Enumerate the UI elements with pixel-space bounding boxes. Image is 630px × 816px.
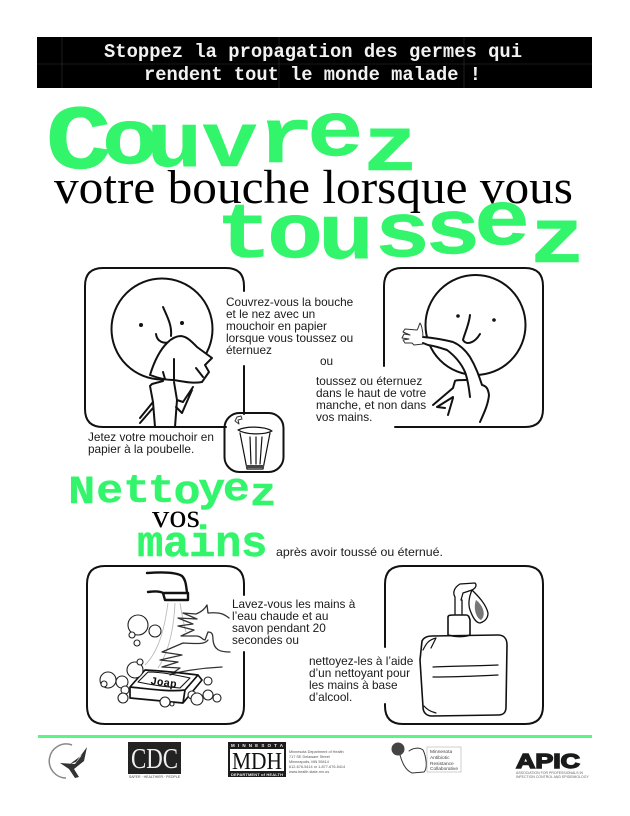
panel frame 3 xyxy=(87,566,244,724)
instruction: sleeve text: dans le haut de votre xyxy=(316,386,427,400)
header banner: Stoppez la propagation des germes qui xyxy=(104,41,522,63)
header banner: rendent tout le monde malade ! xyxy=(144,64,481,86)
panel frame 2 xyxy=(384,268,543,427)
instruction: cover text: éternuez xyxy=(226,343,272,357)
instruction: sleeve text: manche, et non dans xyxy=(316,398,426,412)
panel: trash can xyxy=(224,413,284,472)
instruction: sleeve text: toussez ou éternuez xyxy=(316,374,422,388)
text: MDH address xyxy=(289,750,345,774)
panel: soap washing xyxy=(87,566,244,724)
logo: CDC: CDC xyxy=(131,743,178,775)
logo: MDH: DEPARTMENT of HEALTH xyxy=(231,772,283,777)
icon: tap xyxy=(147,572,188,600)
instruction: trash text xyxy=(88,430,214,456)
instruction: cover text: Couvrez-vous la bouche xyxy=(226,295,354,309)
logo: Minnesota Antibiotic Resistance Collaborative: Resistance xyxy=(430,761,454,767)
panel: cover with tissue xyxy=(85,268,244,427)
logo: APIC: ASSOCIATION FOR PROFESSIONALS IN xyxy=(516,771,584,775)
headline: vos: vos xyxy=(152,499,200,535)
instruction: wash text: savon pendant 20 xyxy=(232,621,326,635)
logo: Minnesota Antibiotic Resistance Collaborative xyxy=(392,742,461,773)
logo: MDH: MINNESOTA xyxy=(231,743,284,748)
panel frame 4 xyxy=(385,566,543,724)
logo: Minnesota Antibiotic Resistance Collaborative: Antibiotic xyxy=(430,755,450,761)
instruction: cover text: lorsque vous toussez ou xyxy=(226,331,353,345)
icon: soap bar xyxy=(130,670,202,703)
text: MDH address: 612-676-5414 or 1-877-676-5414 xyxy=(289,765,345,769)
instruction: cover text: et le nez avec un xyxy=(226,307,315,321)
instruction: trash text: papier à la poubelle. xyxy=(88,442,194,456)
logo: Minnesota Antibiotic Resistance Collaborative: Minnesota xyxy=(430,749,452,755)
headline: toussez: toussez xyxy=(216,179,585,286)
panel frame 1 xyxy=(85,268,244,427)
instruction: trash text: Jetez votre mouchoir en xyxy=(88,430,214,444)
instruction: wash text: secondes ou xyxy=(232,633,299,647)
icon: bubbles xyxy=(100,615,221,707)
instruction: sanitizer text: d’un nettoyant pour xyxy=(309,666,410,680)
instruction: sleeve text: vos mains. xyxy=(316,410,372,424)
instruction: sleeve text xyxy=(316,374,427,424)
text: MDH address: Minneapolis, MN 55414 xyxy=(289,760,329,764)
headline: Nettoyez: Nettoyez xyxy=(68,467,277,517)
instruction: sanitizer text: les mains à base xyxy=(309,678,398,692)
icon: water streams xyxy=(145,603,186,668)
footer divider xyxy=(38,735,592,738)
text: MDH address: Minnesota Department of Health xyxy=(289,750,344,754)
icon: sanitizer bottle xyxy=(420,583,507,716)
panel: sleeve xyxy=(384,268,543,427)
instruction: cover text xyxy=(226,295,354,357)
headline: mains: mains xyxy=(137,520,267,570)
instruction: after coughing: après avoir toussé ou éternué. xyxy=(276,545,443,559)
logo: APIC: INFECTION CONTROL AND EPIDEMIOLOGY xyxy=(516,775,589,779)
instruction: sanitizer text: d’alcool. xyxy=(309,690,352,704)
logo: MDH xyxy=(228,742,286,777)
instruction: wash text: Lavez-vous les mains à xyxy=(232,597,356,611)
logo: APIC xyxy=(516,751,589,779)
instruction: sanitizer text xyxy=(309,654,414,704)
instruction: sanitizer text: nettoyez-les à l’aide xyxy=(309,654,414,668)
instruction: cover text: mouchoir en papier xyxy=(226,319,327,333)
headline: votre bouche lorsque vous: votre bouche lorsque vous xyxy=(54,161,573,214)
icon: hands xyxy=(178,605,230,652)
icon: soap bar: Joap xyxy=(149,676,178,692)
panel: sanitizer xyxy=(385,566,543,724)
headline: Couvrez: Couvrez xyxy=(46,90,419,196)
text: MDH address: 717 SE Delaware Street xyxy=(289,755,331,759)
logo: Minnesota Antibiotic Resistance Collaborative: Collaborative xyxy=(430,766,458,772)
logo: APIC: APIC xyxy=(516,751,580,773)
logo: CDC: SAFER · HEALTHIER · PEOPLE xyxy=(129,775,181,779)
instruction: ou: ou xyxy=(320,354,333,368)
icon: face coughing into sleeve xyxy=(402,275,526,422)
logo: HHS xyxy=(49,744,87,778)
instruction: wash text: l’eau chaude et au xyxy=(232,609,328,623)
instruction: wash text xyxy=(232,597,356,647)
text: MDH address: www.health.state.mn.us xyxy=(289,770,329,774)
icon: face with tissue xyxy=(112,278,212,427)
logo: MDH: MDH xyxy=(232,749,282,775)
header banner xyxy=(37,37,592,88)
